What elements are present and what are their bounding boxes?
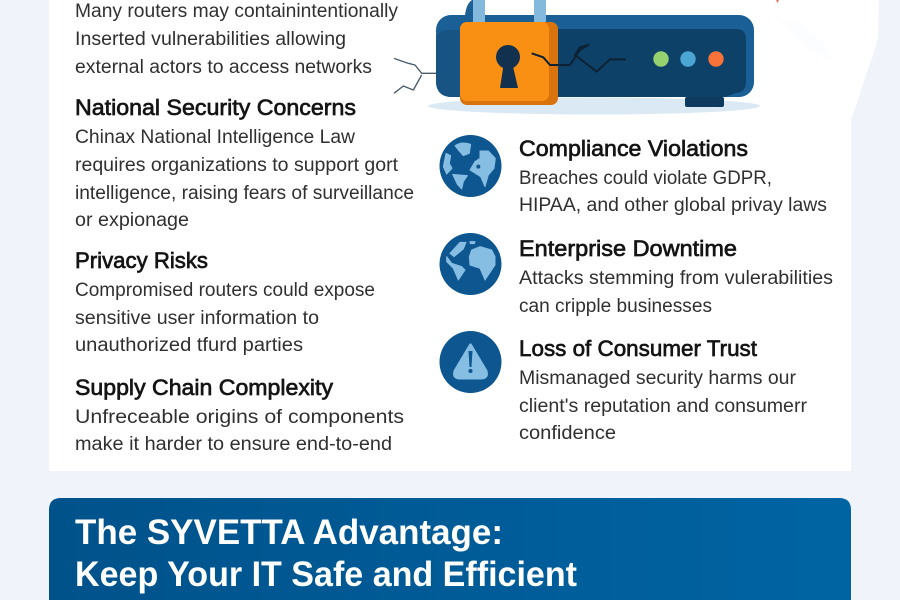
text block: national security concerns: intelligence, raising fears of surveillance bbox=[75, 183, 414, 204]
text block: national security concerns: requires organizations to support gort bbox=[75, 155, 399, 176]
text block: compliance violations: HIPAA, and other global privay laws bbox=[519, 195, 827, 216]
heading: banner title: Keep Your IT Safe and Efficient bbox=[75, 555, 577, 594]
text block: supply chain complexity: make it harder to ensure end-to-end bbox=[75, 434, 392, 455]
text block: supply chain complexity: Supply Chain Complexity bbox=[75, 375, 334, 400]
icon: globe downtime bbox=[440, 233, 502, 295]
text block: loss of consumer trust: client's reputation and consumerr bbox=[519, 396, 808, 417]
text block: national security concerns: Chinax National Intelligence Law bbox=[75, 127, 355, 148]
text block: supply chain complexity: Unfreceable origins of components bbox=[75, 407, 404, 428]
text block: enterprise downtime bbox=[519, 236, 833, 317]
text block: compliance violations bbox=[519, 136, 827, 216]
text block: enterprise downtime: Attacks stemming from vulerabilities bbox=[519, 268, 833, 289]
icon: router with padlock bbox=[394, 0, 760, 114]
text block: national security concerns: or expionage bbox=[75, 210, 189, 231]
text block: backdoor risk description: Many routers may containintentionally bbox=[75, 1, 399, 22]
text block: backdoor risk description bbox=[75, 1, 399, 78]
text block: backdoor risk description: external actors to access networks bbox=[75, 57, 372, 78]
text block: privacy risks: Privacy Risks bbox=[75, 248, 208, 273]
text block: loss of consumer trust: Loss of Consumer Trust bbox=[519, 336, 758, 361]
text block: enterprise downtime: can cripple businesses bbox=[519, 296, 712, 317]
text block: privacy risks: unauthorized tfurd parties bbox=[75, 335, 303, 356]
text block: compliance violations: Compliance Violations bbox=[519, 136, 748, 161]
icon: globe compliance bbox=[440, 135, 502, 197]
panel: SYVETTA advantage banner bbox=[49, 498, 851, 600]
text block: loss of consumer trust bbox=[519, 336, 808, 444]
text block: national security concerns: National Security Concerns bbox=[75, 95, 356, 120]
text block: compliance violations: Breaches could violate GDPR, bbox=[519, 168, 772, 189]
icon: warning triangle bbox=[440, 331, 502, 393]
text block: privacy risks: Compromised routers could expose bbox=[75, 280, 375, 301]
text block: backdoor risk description: Inserted vulnerabilities allowing bbox=[75, 29, 346, 50]
text block: privacy risks bbox=[75, 248, 375, 356]
text block: national security concerns bbox=[75, 95, 414, 231]
heading: banner title bbox=[75, 513, 577, 594]
heading: banner title: The SYVETTA Advantage: bbox=[75, 513, 503, 552]
text block: loss of consumer trust: Mismanaged security harms our bbox=[519, 368, 797, 389]
text block: enterprise downtime: Enterprise Downtime bbox=[519, 236, 737, 261]
panel: white content card bbox=[49, 0, 879, 471]
text block: privacy risks: sensitive user information to bbox=[75, 308, 319, 329]
text block: loss of consumer trust: confidence bbox=[519, 423, 616, 444]
text block: supply chain complexity bbox=[75, 375, 404, 455]
